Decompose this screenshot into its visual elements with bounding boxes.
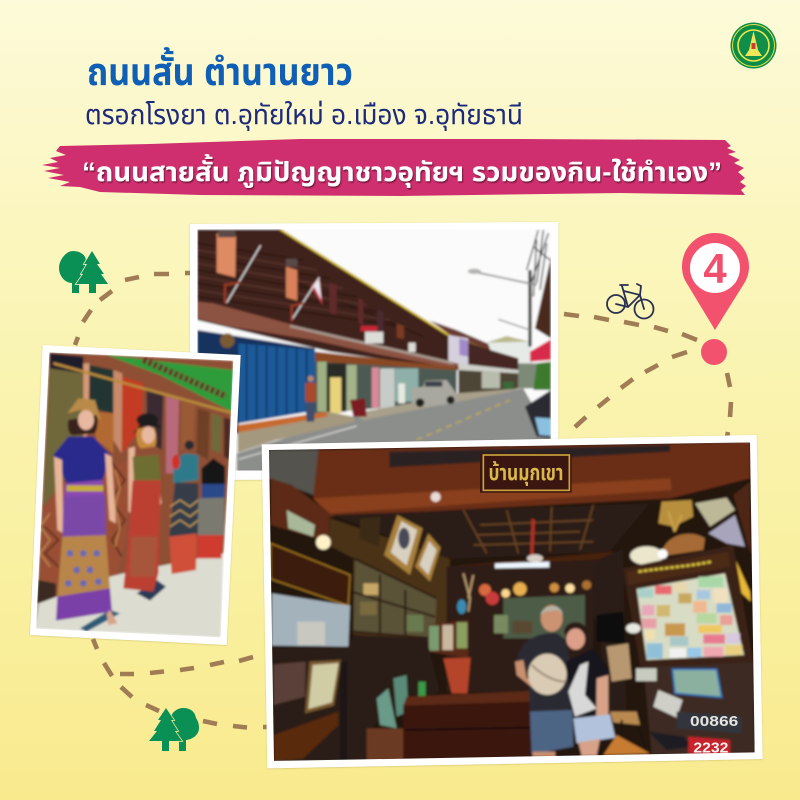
icon: bicycle: [607, 284, 654, 318]
icon: trees top left: [59, 251, 108, 293]
old vehicle plates: 2232: [693, 740, 728, 756]
dashed route: [75, 273, 731, 728]
old vehicle plates: 00866: [690, 714, 738, 730]
subtitle: ตรอกโรงยา ต.อุทัยใหม่ อ.เมือง จ.อุทัยธานี: [85, 99, 523, 131]
shop sign: บ้านมุกเขา: [488, 460, 563, 486]
map pin number 4: [682, 233, 749, 330]
shop sign: [480, 453, 572, 493]
map dot: [701, 339, 727, 365]
photo: wooden shophouse street: [190, 222, 558, 480]
old vehicle plates: [690, 716, 738, 752]
photo: old shop interior with couple: [262, 435, 763, 768]
title: ถนนสั้น ตำนานยาว: [87, 46, 353, 94]
slogan banner: [42, 139, 746, 196]
icon: trees bottom: [149, 708, 199, 751]
photo: woven textile mannequins: [30, 345, 241, 645]
logo emblem: [730, 22, 776, 68]
slogan banner: “ถนนสายสั้น ภูมิปัญญาชาวอุทัยฯ รวมของกิน-ใช้ทำเอง”: [82, 154, 722, 188]
map pin number 4: 4: [703, 245, 727, 292]
